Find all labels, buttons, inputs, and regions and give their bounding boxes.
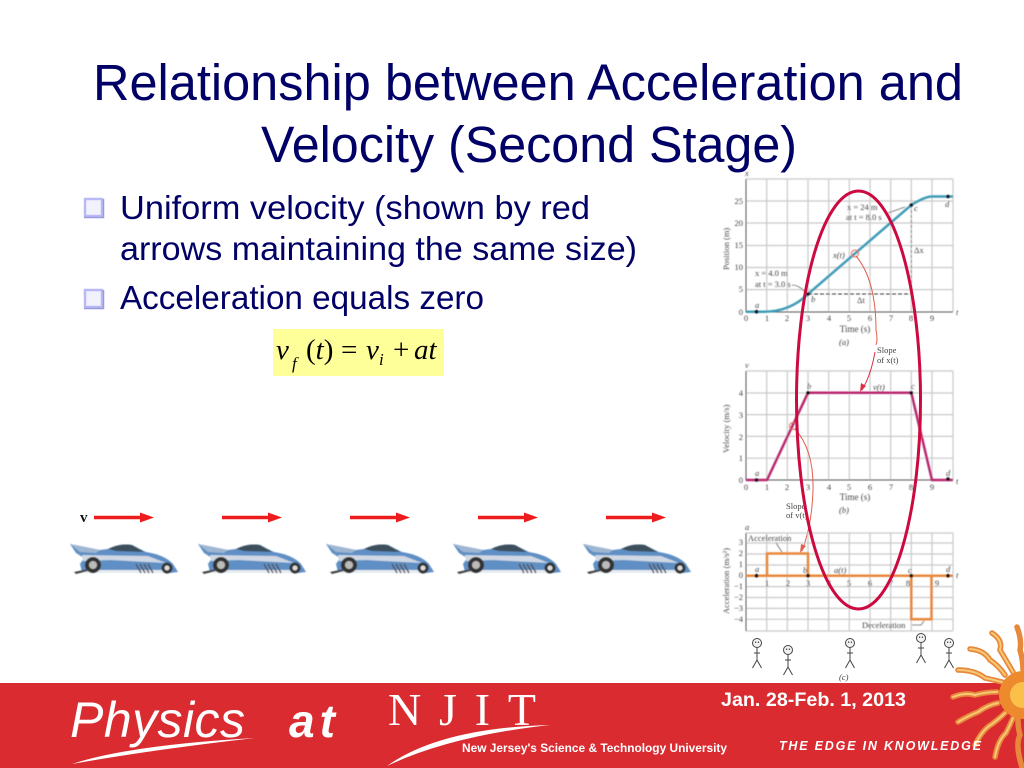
chart: velocity vs time: v(t) bbox=[873, 382, 885, 392]
title bbox=[93, 54, 963, 173]
chart: velocity vs time: 3 bbox=[806, 482, 810, 492]
chart: position vs time: 3 bbox=[806, 313, 810, 323]
chart: position vs time: 8 bbox=[909, 313, 913, 323]
formula box: at bbox=[414, 334, 438, 366]
chart: position vs time: 4 bbox=[827, 313, 832, 323]
chart: velocity vs time: c bbox=[911, 381, 915, 391]
chart: velocity vs time: (b) bbox=[839, 505, 849, 515]
bullet: acceleration zero: Acceleration equals zero bbox=[120, 280, 484, 317]
chart: acceleration vs time: a bbox=[745, 522, 749, 532]
chart: position vs time: 0 bbox=[744, 313, 748, 323]
chart: velocity vs time: 0 bbox=[739, 475, 743, 485]
chart: acceleration vs time: 3 bbox=[806, 578, 810, 588]
bullet: uniform velocity: Uniform velocity (shown by red bbox=[120, 190, 590, 227]
chart: position vs time: 6 bbox=[868, 313, 872, 323]
tagline: THE EDGE IN KNOWLEDGE bbox=[779, 739, 982, 753]
chart: acceleration vs time: d bbox=[946, 564, 951, 574]
chart: velocity vs time: 3 bbox=[739, 410, 743, 420]
chart: velocity vs time: 9 bbox=[930, 482, 934, 492]
logo: Physics at NJIT: NJIT bbox=[388, 684, 536, 735]
chart: position vs time: Δx bbox=[914, 245, 924, 255]
chart: velocity vs time: v bbox=[745, 360, 749, 370]
cars bbox=[70, 544, 691, 574]
chart: acceleration vs time: 5 bbox=[847, 578, 851, 588]
chart: velocity vs time: d bbox=[946, 468, 951, 478]
logo: Physics at NJIT bbox=[70, 684, 727, 766]
chart: acceleration vs time: 1 bbox=[739, 559, 743, 569]
chart: position vs time: a bbox=[755, 300, 759, 310]
chart: position vs time: x = 4.0 m bbox=[755, 268, 788, 278]
chart: position vs time: 2 bbox=[785, 313, 789, 323]
chart: acceleration vs time: 3 bbox=[739, 537, 743, 547]
chart: velocity vs time: 0 bbox=[744, 482, 748, 492]
chart: acceleration vs time: Acceleration bbox=[748, 533, 792, 543]
chart: acceleration vs time: 6 bbox=[868, 578, 872, 588]
chart: acceleration vs time: b bbox=[803, 565, 807, 575]
formula box: i bbox=[379, 350, 384, 369]
chart: position vs time: 7 bbox=[889, 313, 893, 323]
chart: position vs time: x(t) bbox=[832, 250, 845, 260]
chart: position vs time: 1 bbox=[765, 313, 769, 323]
chart: velocity vs time: b bbox=[807, 381, 811, 391]
chart: position vs time: 5 bbox=[739, 284, 743, 294]
chart: velocity vs time: 4 bbox=[739, 388, 744, 398]
red ellipse bbox=[796, 191, 920, 609]
logo: Physics at NJIT: at bbox=[289, 695, 337, 747]
chart: position vs time: t bbox=[956, 307, 959, 317]
chart: position vs time: x bbox=[744, 168, 749, 178]
chart: position vs time: c bbox=[914, 203, 918, 213]
chart: position vs time: 20 bbox=[734, 218, 743, 228]
chart: position vs time: 15 bbox=[734, 240, 743, 250]
chart: velocity vs time bbox=[721, 360, 959, 515]
formula box: (t) bbox=[306, 334, 333, 366]
chart: acceleration vs time: 7 bbox=[889, 578, 893, 588]
chart: acceleration vs time: 9 bbox=[935, 578, 939, 588]
chart: position vs time: Position (m) bbox=[721, 228, 731, 270]
chart: velocity vs time: 7 bbox=[889, 482, 893, 492]
stick figures bbox=[752, 634, 954, 675]
chart: acceleration vs time: t bbox=[956, 570, 959, 580]
formula box: + bbox=[393, 334, 409, 366]
chart: acceleration vs time: −1 bbox=[734, 581, 743, 591]
bullet: uniform velocity bbox=[84, 190, 637, 268]
chart: velocity vs time: 2 bbox=[739, 432, 743, 442]
chart: acceleration vs time: c bbox=[908, 565, 912, 575]
icon: sun bbox=[953, 627, 1024, 767]
title: Relationship between Acceleration and bbox=[93, 54, 963, 111]
chart: velocity vs time: 1 bbox=[739, 453, 743, 463]
chart: acceleration vs time: a bbox=[755, 564, 759, 574]
chart: acceleration vs time: 1 bbox=[765, 578, 769, 588]
velocity label: v bbox=[80, 510, 88, 526]
chart: position vs time: 25 bbox=[734, 196, 743, 206]
formula box: v bbox=[366, 334, 379, 366]
slope annotation arrows bbox=[795, 256, 877, 553]
chart: velocity vs time: 2 bbox=[785, 482, 789, 492]
chart: acceleration vs time: −3 bbox=[734, 603, 743, 613]
chart: position vs time: Time (s) bbox=[840, 324, 870, 334]
chart: acceleration vs time: 2 bbox=[786, 578, 790, 588]
chart: velocity vs time: 5 bbox=[847, 482, 851, 492]
chart: position vs time: x = 24 m bbox=[847, 202, 878, 212]
chart: position vs time: at t = 3.0 s bbox=[755, 279, 791, 289]
red velocity arrows bbox=[94, 512, 666, 522]
title: Velocity (Second Stage) bbox=[261, 116, 797, 173]
chart: acceleration vs time: Deceleration bbox=[862, 620, 906, 630]
chart: acceleration vs time: −2 bbox=[734, 592, 743, 602]
chart: velocity vs time: a bbox=[755, 468, 759, 478]
chart: velocity vs time: 1 bbox=[765, 482, 769, 492]
chart: position vs time: 10 bbox=[734, 262, 743, 272]
formula box bbox=[273, 329, 444, 376]
slope labels: Slope bbox=[786, 501, 806, 511]
chart: acceleration vs time: Acceleration (m/s²) bbox=[721, 548, 731, 614]
slope labels bbox=[786, 345, 899, 520]
chart: velocity vs time: Velocity (m/s) bbox=[721, 404, 731, 453]
chart: velocity vs time: 6 bbox=[868, 482, 872, 492]
chart: position vs time: Δt bbox=[857, 295, 865, 305]
bullet list bbox=[84, 190, 637, 317]
chart: acceleration vs time: 0 bbox=[739, 570, 743, 580]
bullet: uniform velocity: arrows maintaining the same size) bbox=[120, 231, 637, 268]
logo: Physics at NJIT: Physics bbox=[70, 692, 245, 748]
chart: position vs time bbox=[721, 168, 959, 347]
formula box: f bbox=[292, 354, 299, 373]
chart: acceleration vs time bbox=[721, 522, 959, 631]
chart: position vs time: b bbox=[811, 294, 815, 304]
chart: position vs time: (a) bbox=[839, 337, 849, 347]
slope labels: Slope bbox=[877, 345, 897, 355]
figure caption: (c) bbox=[839, 672, 849, 682]
chart: position vs time: at t = 8.0 s bbox=[846, 212, 882, 222]
chart: acceleration vs time: a(t) bbox=[834, 565, 846, 575]
formula box: = bbox=[341, 334, 357, 366]
chart: acceleration vs time: 8 bbox=[906, 578, 910, 588]
chart: position vs time: 5 bbox=[847, 313, 851, 323]
footer band bbox=[0, 683, 1024, 768]
chart: position vs time: 0 bbox=[739, 307, 743, 317]
chart: position vs time: 9 bbox=[930, 313, 934, 323]
slope labels: of v(t) bbox=[786, 510, 808, 520]
chart: position vs time: d bbox=[945, 199, 950, 209]
chart: acceleration vs time: −4 bbox=[734, 614, 744, 624]
chart: velocity vs time: Time (s) bbox=[840, 492, 870, 502]
chart: velocity vs time: 8 bbox=[909, 482, 913, 492]
chart: acceleration vs time: 4 bbox=[827, 578, 832, 588]
date: Jan. 28-Feb. 1, 2013 bbox=[721, 690, 906, 711]
chart: velocity vs time: 4 bbox=[827, 482, 832, 492]
formula box: v bbox=[276, 334, 289, 366]
logo: Physics at NJIT: New Jersey's Science & Technology University bbox=[462, 741, 727, 755]
chart: velocity vs time: t bbox=[956, 476, 959, 486]
chart: acceleration vs time: 2 bbox=[739, 548, 743, 558]
slope labels: of x(t) bbox=[877, 355, 899, 365]
